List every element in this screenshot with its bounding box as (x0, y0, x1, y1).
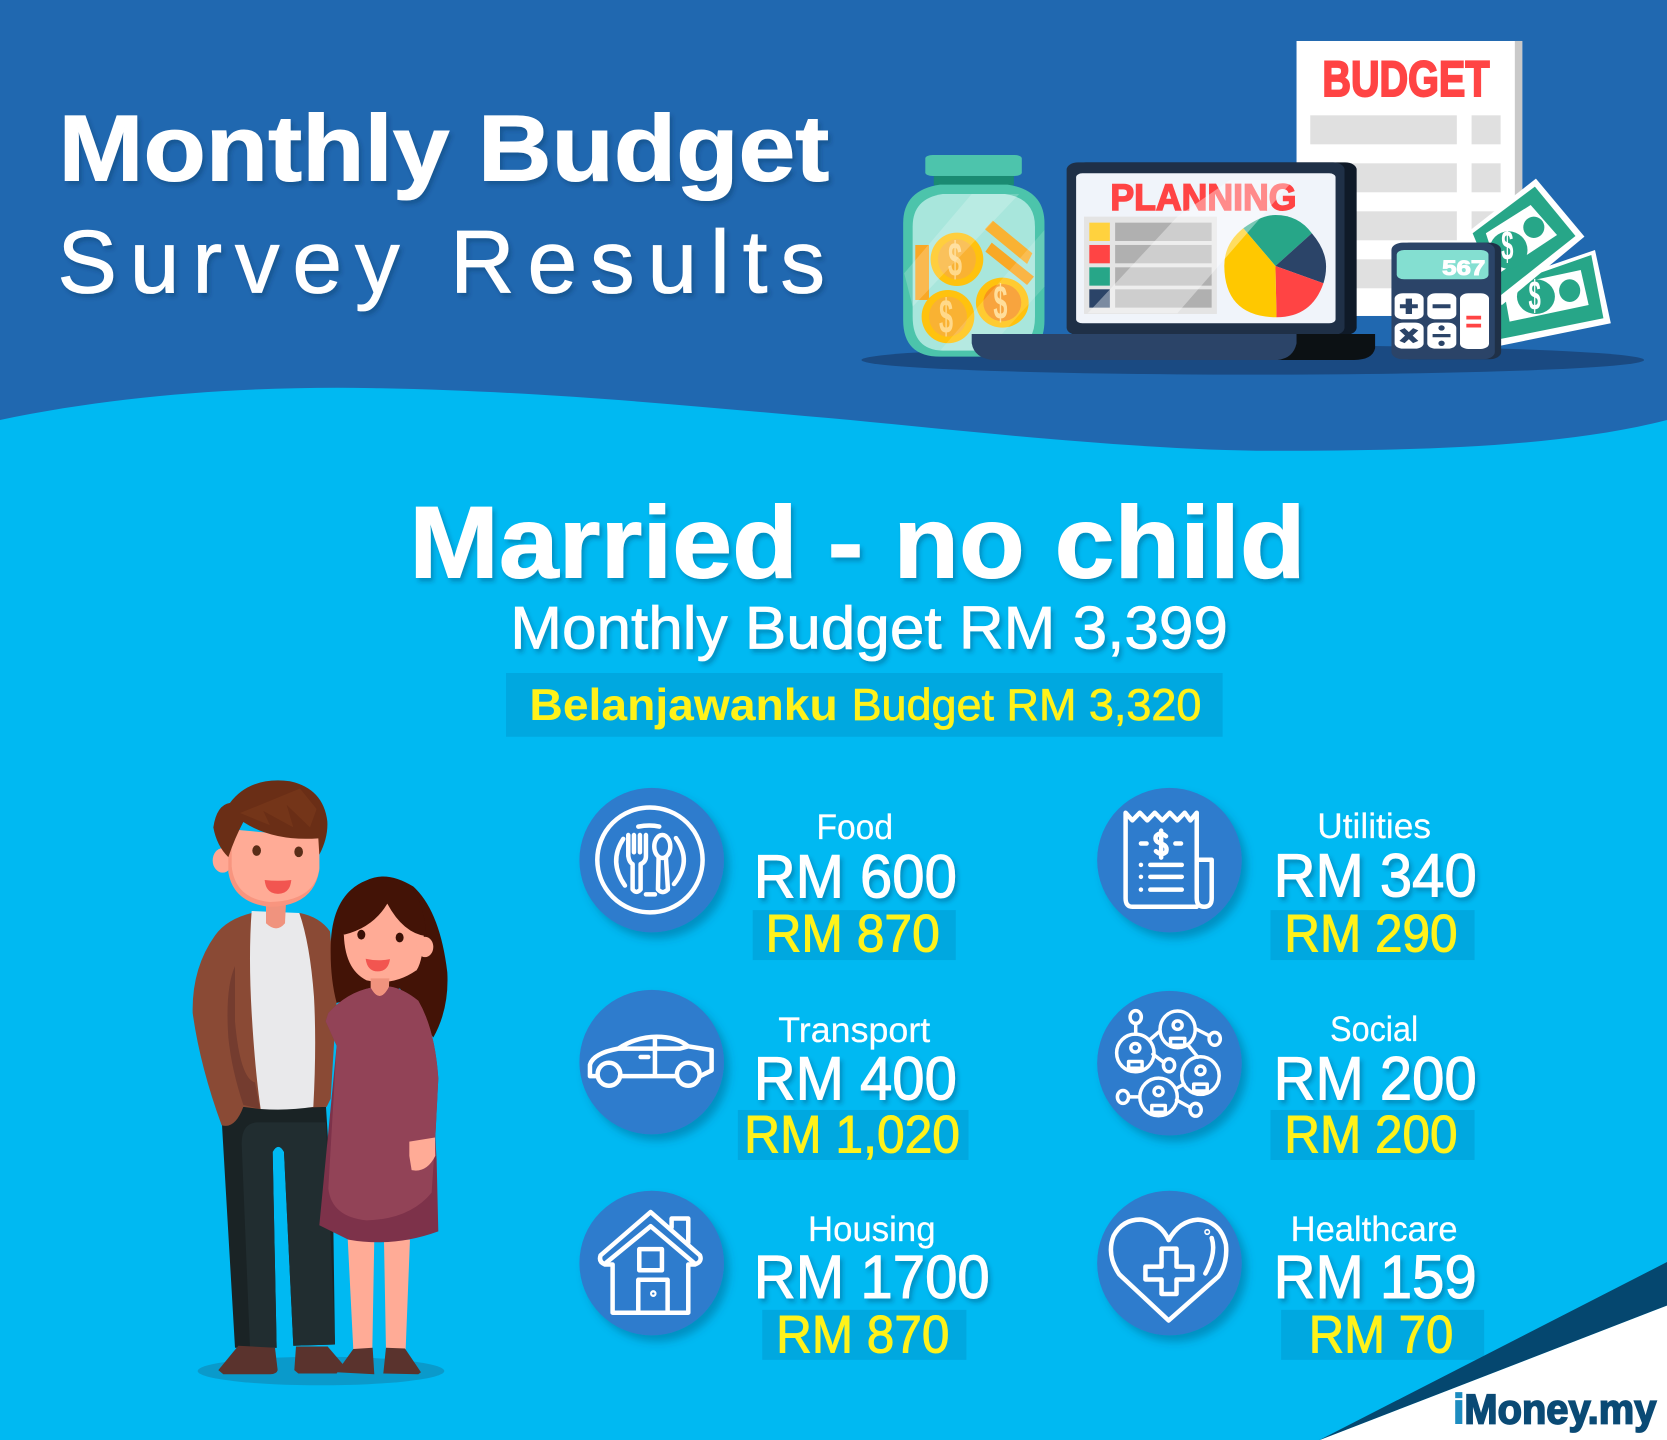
expense: transport: RM 1,020 (744, 1106, 960, 1165)
expense: transport: Transport (778, 1011, 931, 1050)
icon: house (579, 1191, 724, 1335)
illustration: couple (193, 780, 448, 1385)
pie chart (1224, 215, 1326, 317)
expense: social (1097, 991, 1477, 1165)
expense: healthcare: RM 70 (1309, 1305, 1453, 1364)
callout: Belanjawanku budget: Budget RM 3,320 (852, 681, 1201, 730)
logo: iMoney.my: iMoney.my (1453, 1386, 1656, 1433)
money bills: $ (1529, 274, 1541, 320)
jar with coins: $ (939, 290, 953, 344)
icon: plate and cutlery (579, 788, 724, 932)
expense: food: RM 870 (765, 905, 940, 964)
expense: transport (579, 990, 969, 1165)
expense: utilities: RM 340 (1274, 841, 1477, 910)
calculator: 567 (1442, 256, 1485, 280)
expense: food: Food (816, 808, 893, 847)
money bills (1466, 179, 1611, 346)
expense: social: RM 200 (1284, 1106, 1458, 1165)
budget sheet (1297, 41, 1522, 316)
sub heading: monthly budget: Monthly Budget RM 3,399 (510, 594, 1228, 662)
expense: healthcare: Healthcare (1291, 1210, 1458, 1249)
corner brand wedge (1318, 1262, 1667, 1440)
title: Monthly Budget (58, 96, 829, 201)
title: Survey Results (57, 211, 825, 311)
expense: food (579, 788, 957, 964)
expense: utilities (1097, 788, 1477, 964)
heading: Married - no child: Married - no child (409, 485, 1306, 599)
expense: housing: RM 1700 (754, 1243, 990, 1312)
jar with coins: $ (993, 276, 1007, 330)
expense: housing: Housing (808, 1210, 936, 1249)
expense: social: RM 200 (1274, 1044, 1477, 1113)
expense: healthcare (1097, 1191, 1484, 1364)
laptop planning screen: PLANNING (1110, 177, 1297, 219)
wave background (0, 388, 1667, 1440)
icon: network of people (1097, 991, 1242, 1135)
title (57, 96, 829, 311)
expense: social: Social (1330, 1010, 1418, 1049)
expense: healthcare: RM 159 (1274, 1243, 1477, 1312)
man (193, 780, 343, 1374)
icon: bill (1097, 788, 1242, 932)
callout: Belanjawanku budget (506, 673, 1223, 737)
calculator (1391, 243, 1501, 359)
expense: housing: RM 870 (776, 1305, 949, 1364)
expense: housing (579, 1191, 990, 1364)
expense: utilities: Utilities (1317, 807, 1431, 846)
expense: utilities: RM 290 (1284, 905, 1458, 964)
icon: heart with cross (1097, 1191, 1242, 1335)
illustration: budget props (861, 41, 1644, 375)
jar with coins: $ (948, 233, 962, 287)
callout: Belanjawanku budget: Belanjawanku (529, 681, 838, 730)
expense: food: RM 600 (754, 842, 957, 911)
expense: transport: RM 400 (754, 1044, 957, 1113)
budget sheet: BUDGET (1322, 52, 1490, 107)
laptop planning screen (972, 162, 1375, 360)
jar with coins (903, 155, 1044, 357)
woman (319, 876, 448, 1374)
icon: car (579, 990, 724, 1134)
ground shadow (861, 345, 1644, 375)
money bills: $ (1501, 224, 1514, 270)
